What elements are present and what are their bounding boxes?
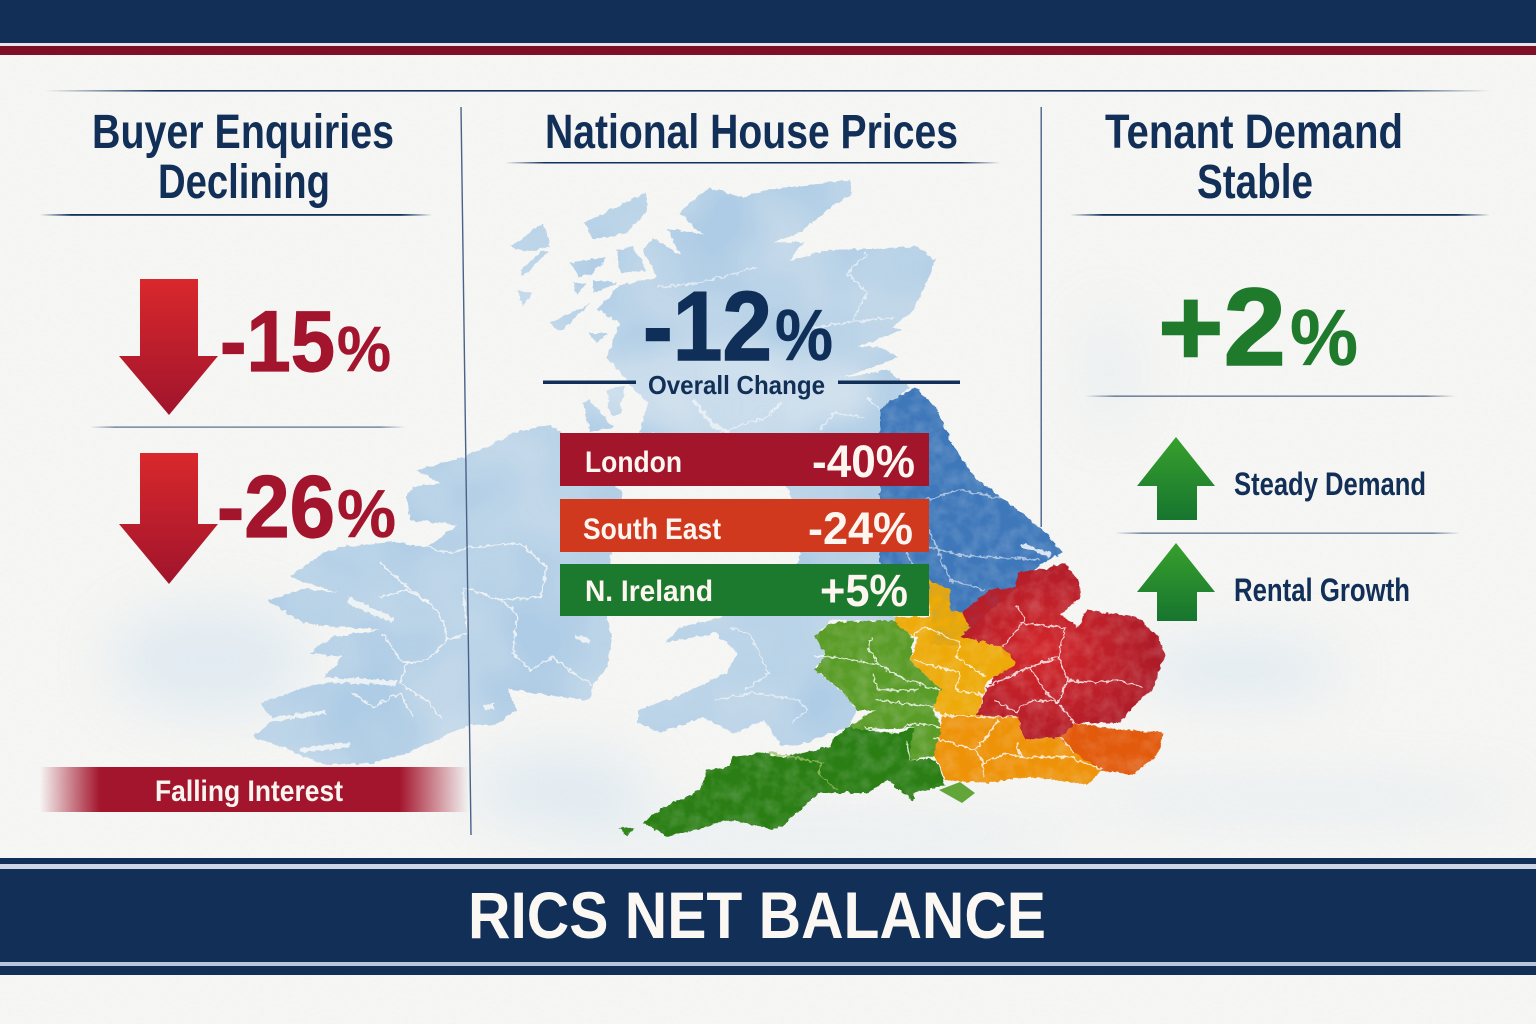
map: South West pale boundary [768, 753, 837, 790]
bar: South East: -24% [808, 503, 913, 554]
label: Overall Change: Overall Change [648, 370, 825, 400]
map: Isles of Scilly [619, 827, 634, 837]
bar: N. Ireland [560, 564, 929, 616]
bar: South East [560, 499, 929, 554]
map: North East and Yorkshire [880, 388, 1062, 645]
bar: South East: South East [583, 513, 721, 546]
label: Rental Growth: Rental Growth [1234, 572, 1410, 608]
wash: lighten centre of Scotland [590, 340, 870, 440]
map: Midlands in amber [891, 580, 1017, 717]
divider left [461, 107, 471, 835]
map: Kent in dark orange [1060, 723, 1163, 775]
map: UK regions [253, 180, 1165, 837]
heading: Buyer Enquiries Declining: Declining [158, 156, 330, 209]
map: Scottish islands [510, 192, 647, 432]
heading: Buyer Enquiries Declining [92, 106, 394, 209]
stat: minus 15 percent: -15 [220, 294, 335, 390]
bar: London [560, 433, 929, 487]
bar: N. Ireland: +5% [820, 565, 908, 616]
stat: plus 2 percent: +2 [1158, 266, 1286, 389]
stat rule [1085, 396, 1455, 397]
divider right [1040, 107, 1042, 527]
label: Overall Change [543, 370, 960, 400]
heading: Buyer Enquiries Declining: Buyer Enquiries [92, 106, 394, 159]
banner: Falling Interest: Falling Interest [155, 775, 343, 808]
panel: buyer enquiries [40, 106, 468, 812]
label: Steady Demand: Steady Demand [1234, 466, 1426, 502]
icon: down arrow two [119, 453, 218, 584]
stat: minus 15 percent: % [337, 313, 391, 385]
stat: minus 26 percent: % [337, 476, 396, 552]
icon: down arrow one [119, 279, 218, 415]
header band [0, 0, 1536, 55]
heading rule [40, 214, 432, 216]
banner: Falling Interest [40, 767, 468, 812]
heading: National House Prices: National House Prices [545, 106, 958, 159]
map: Great Britain mainland pale [597, 180, 935, 745]
map: South West in dark green [642, 727, 945, 837]
icon: up arrow two [1137, 543, 1215, 621]
heading: Tenant Demand Stable [1105, 106, 1403, 209]
stat: minus 26 percent: -26 [217, 457, 335, 556]
stat: minus 12 percent: -12 [643, 271, 772, 381]
map: Ireland county lines [270, 543, 593, 750]
watercolour wash background [110, 310, 1520, 849]
stat: minus 12 percent: % [775, 296, 833, 376]
stat: plus 2 percent: % [1290, 293, 1358, 382]
item rule [1115, 532, 1460, 534]
top rule [45, 90, 1490, 92]
heading rule [505, 162, 1000, 164]
map: South in orange [933, 715, 1102, 785]
bar: London: -40% [812, 436, 915, 487]
map: Isle of Wight [939, 782, 975, 803]
map: Ireland [253, 425, 623, 765]
title: RICS NET BALANCE: RICS NET BALANCE [468, 878, 1046, 952]
heading: Tenant Demand Stable: Tenant Demand [1105, 106, 1403, 159]
map: West Midlands in light green [815, 620, 941, 760]
bar: N. Ireland: N. Ireland [585, 575, 713, 608]
map: East of England in red [960, 563, 1165, 740]
footer band [0, 858, 1536, 975]
icon: up arrow one [1137, 437, 1215, 520]
stat rule [90, 426, 405, 428]
bar: London: London [585, 446, 682, 479]
heading rule [1070, 214, 1490, 216]
panel: tenant demand [1070, 106, 1490, 621]
heading: Tenant Demand Stable: Stable [1197, 156, 1313, 209]
map: county boundary lines [814, 490, 1143, 778]
map: Scotland faint boundary lines [657, 253, 893, 723]
stat: plus 2 percent [1158, 266, 1358, 389]
panel: national house prices [505, 106, 1000, 616]
